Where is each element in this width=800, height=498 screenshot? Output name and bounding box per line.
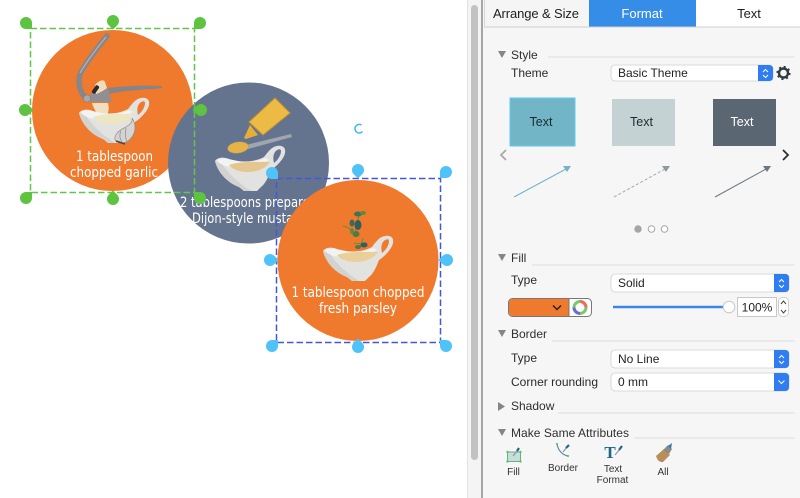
swatch: grey style: Text bbox=[630, 115, 653, 129]
tab bar: Arrange & Size bbox=[493, 6, 579, 21]
section: border: Border bbox=[511, 327, 547, 341]
section: border bbox=[498, 327, 795, 391]
button: all bbox=[656, 443, 672, 478]
button: text format bbox=[597, 443, 629, 486]
icon: next chevron bbox=[783, 150, 788, 160]
button: text format: Format bbox=[597, 475, 629, 486]
pagination dots bbox=[634, 225, 668, 233]
icon: garlic bulb bbox=[115, 118, 135, 144]
icon: mustard bottle bbox=[244, 98, 290, 139]
selection frame: green bbox=[17, 13, 209, 207]
text: 1 tablespoon chopped garlic bbox=[70, 149, 158, 181]
swatch: dark style: Text bbox=[731, 115, 754, 129]
opacity field: 100% bbox=[742, 300, 773, 314]
tab bar: Format bbox=[621, 6, 663, 21]
swatch: blue style bbox=[510, 98, 575, 146]
dropdown: corner rounding bbox=[611, 373, 789, 391]
button: all: All bbox=[657, 467, 669, 478]
circle: chopped garlic bbox=[32, 30, 193, 191]
dropdown: corner rounding: 0 mm bbox=[618, 375, 648, 389]
swatch: dark style bbox=[713, 99, 776, 146]
section: style: Theme bbox=[511, 66, 549, 80]
icon: rotate handle bbox=[355, 124, 362, 133]
section: border: Corner rounding bbox=[511, 375, 598, 389]
text: 1 tablespoon chopped fresh parsley: fresh parsley bbox=[319, 301, 397, 317]
opacity slider bbox=[613, 301, 735, 313]
dropdown: border type bbox=[611, 350, 789, 368]
section: style bbox=[498, 48, 795, 233]
arrow: blue line style bbox=[514, 166, 571, 197]
section: shadow: Shadow bbox=[511, 399, 555, 413]
icon: gear bbox=[777, 67, 790, 79]
section: fill: Fill bbox=[511, 251, 526, 265]
icon: parsley sprig bbox=[343, 211, 368, 249]
dropdown: fill type: Solid bbox=[618, 276, 645, 290]
section: border: Type bbox=[511, 351, 537, 365]
tab bar: Text bbox=[737, 6, 761, 21]
button: text format: T bbox=[604, 443, 616, 462]
dropdown: fill type bbox=[611, 274, 789, 292]
button: border bbox=[548, 443, 579, 474]
button: border: Border bbox=[548, 463, 579, 474]
text: 1 tablespoon chopped garlic: chopped garlic bbox=[70, 165, 158, 181]
handles: blue bbox=[262, 162, 455, 355]
icon: gravy boat bbox=[323, 236, 393, 281]
text: 1 tablespoon chopped fresh parsley: 1 tablespoon chopped bbox=[292, 285, 424, 301]
handles: green bbox=[17, 13, 209, 207]
text: 1 tablespoon chopped fresh parsley bbox=[292, 285, 424, 317]
text: 1 tablespoon chopped garlic: 1 tablespoon bbox=[76, 149, 153, 165]
swatch: blue style: Text bbox=[530, 115, 553, 129]
section: make same attributes bbox=[498, 426, 795, 486]
dropdown: border type: No Line bbox=[618, 352, 660, 366]
swatch: grey style bbox=[612, 99, 675, 146]
tab bar bbox=[484, 0, 800, 27]
button: text format: Text bbox=[604, 464, 622, 475]
scrollbar bbox=[468, 0, 482, 498]
dropdown: theme: Basic Theme bbox=[618, 66, 688, 80]
canvas background bbox=[0, 0, 468, 498]
section: style: Style bbox=[511, 48, 538, 62]
icon: previous chevron bbox=[501, 150, 506, 160]
arrow: dashed line style bbox=[614, 166, 670, 197]
selection frame: blue bbox=[262, 162, 455, 355]
icon: gravy boat bbox=[215, 146, 285, 191]
icon: spoon bbox=[227, 134, 292, 154]
text: 2 tablespoons prepared Dijon-style mustard: 2 tablespoons prepared bbox=[180, 195, 317, 211]
section: shadow bbox=[498, 399, 795, 413]
circle: Dijon mustard bbox=[168, 82, 329, 244]
text: 2 tablespoons prepared Dijon-style mustard bbox=[180, 195, 317, 227]
icon: garlic press bbox=[79, 36, 162, 118]
circle: chopped parsley bbox=[278, 180, 438, 341]
panel: format sidebar bbox=[482, 0, 800, 498]
arrow: dark line style bbox=[715, 166, 771, 197]
icon: gravy boat bbox=[79, 98, 149, 143]
section: fill bbox=[498, 251, 795, 316]
section: make same attributes: Make Same Attributes bbox=[511, 426, 629, 440]
button: fill bbox=[506, 448, 522, 478]
button: fill: Fill bbox=[507, 467, 520, 478]
dropdown: theme bbox=[611, 65, 773, 81]
opacity field bbox=[738, 298, 788, 316]
section: fill: Type bbox=[511, 273, 537, 287]
colour well bbox=[508, 298, 592, 316]
text: 2 tablespoons prepared Dijon-style mustard: Dijon-style mustard bbox=[192, 211, 305, 227]
